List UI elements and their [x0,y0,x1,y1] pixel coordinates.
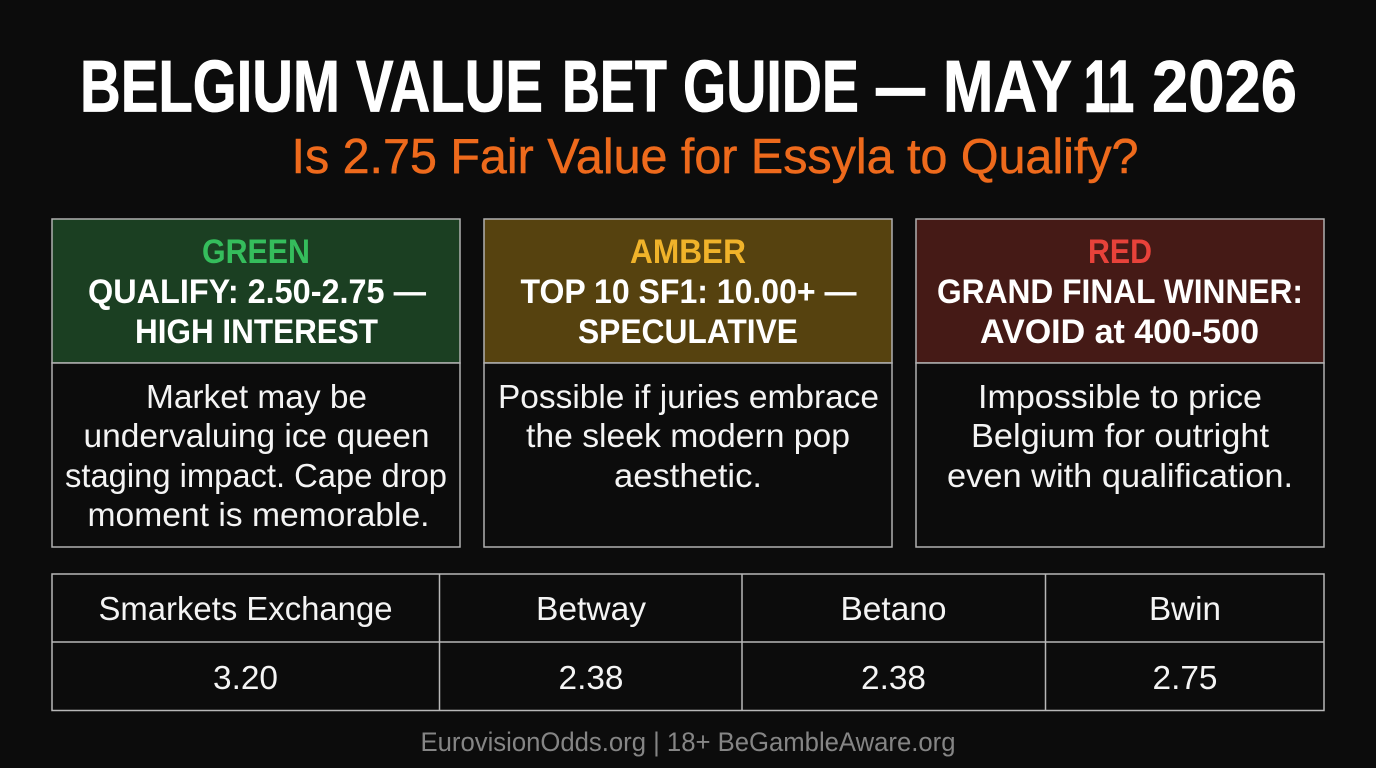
amber heading: SPECULATIVE [578,313,798,351]
green body text: staging impact. Cape drop [65,457,447,494]
table values: 2.75 [1152,659,1218,696]
red body text: Impossible to price [978,378,1262,415]
table headers: Betway [536,590,647,627]
red label: RED [1088,233,1152,271]
title: MAY [943,46,1072,128]
title: VALUE [356,46,543,128]
title [80,46,1297,128]
odds table [52,574,1324,710]
green heading: HIGH INTEREST [135,313,378,351]
red heading: GRAND FINAL WINNER: [937,273,1303,311]
red body text: even with qualification. [947,457,1293,494]
amber heading: TOP 10 SF1: 10.00+ — [520,273,856,311]
green body text: Market may be [146,378,367,415]
table headers: Bwin [1149,590,1221,627]
green body text: moment is memorable. [88,496,430,533]
table headers: Smarkets Exchange [98,590,392,627]
amber heading [520,273,856,351]
subtitle: Is 2.75 Fair Value for Essyla to Qualify? [292,130,1138,184]
red heading: AVOID at 400-500 [980,313,1259,351]
amber body text [498,378,879,494]
title: GUIDE [683,46,859,128]
green body text [65,378,447,533]
table values: 3.20 [213,659,278,696]
green heading [88,273,426,351]
red body text: Belgium for outright [971,417,1269,454]
panel: green [52,219,460,547]
panel: amber [484,219,892,547]
table values [213,659,1218,696]
table values: 2.38 [558,659,624,696]
amber body box [484,363,892,547]
title: 11 [1084,46,1134,128]
green heading: QUALIFY: 2.50-2.75 — [88,273,426,311]
title: BET [562,46,667,128]
green body box [52,363,460,547]
red body box [916,363,1324,547]
table values: 2.38 [861,659,926,696]
amber body text: the sleek modern pop [526,417,850,454]
green header background [52,219,460,363]
title: — [876,46,925,128]
amber header background [484,219,892,363]
title: BELGIUM [80,46,340,128]
table headers: Betano [840,590,946,627]
amber body text: Possible if juries embrace [498,378,879,415]
red body text [947,378,1293,494]
green body text: undervaluing ice queen [84,417,430,454]
panel: red [916,219,1324,547]
amber label: AMBER [630,233,746,271]
red header background [916,219,1324,363]
footer: EurovisionOdds.org | 18+ BeGambleAware.org [420,727,956,757]
red heading [937,273,1303,351]
green label: GREEN [202,233,310,271]
table headers [98,590,1221,627]
amber body text: aesthetic. [614,457,762,494]
title: 2026 [1152,46,1297,128]
